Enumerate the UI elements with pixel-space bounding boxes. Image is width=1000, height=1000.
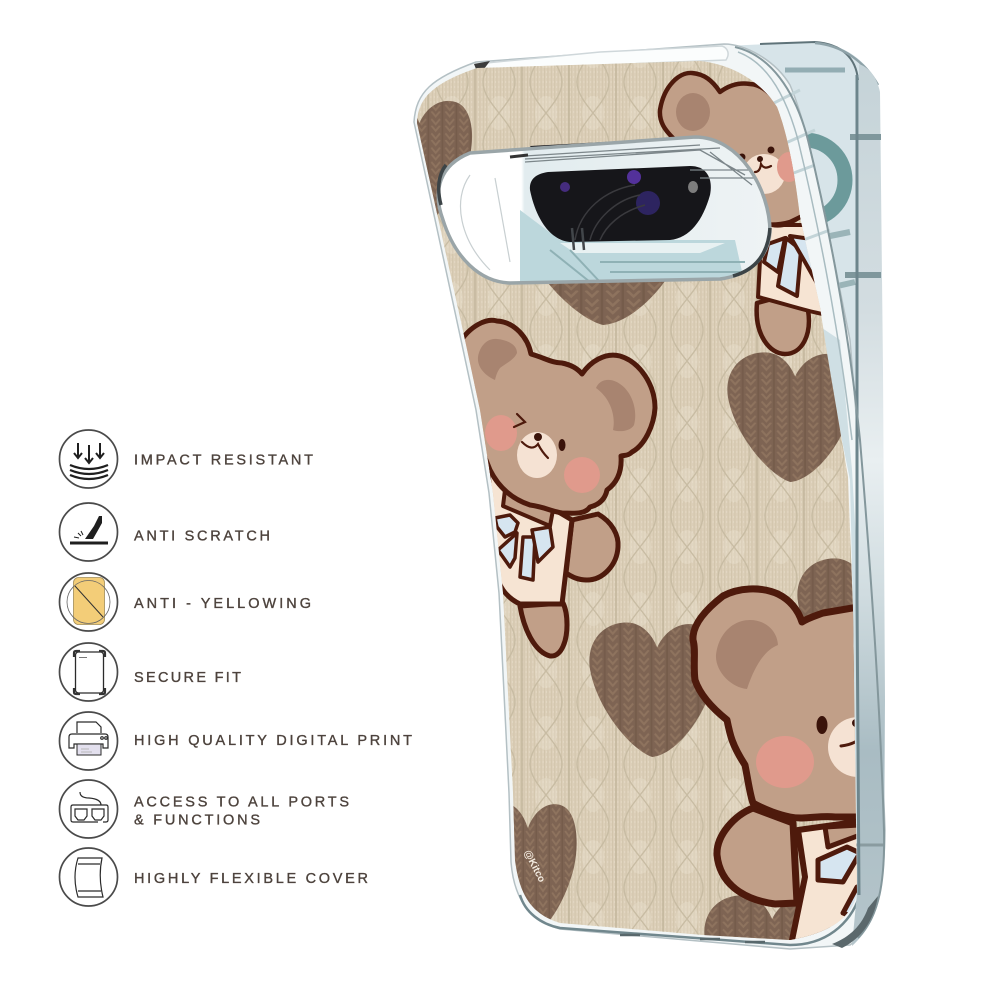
feature: ports and functions: & FUNCTIONS	[134, 812, 260, 828]
watermark: @Kitco	[521, 848, 547, 884]
bear: centre left	[458, 320, 655, 656]
bow	[495, 515, 553, 580]
bear: top right	[660, 73, 840, 354]
phone: side rail	[735, 47, 885, 948]
feature: anti yellowing: ANTI - YELLOWING	[134, 596, 311, 612]
feature: secure fit	[60, 643, 241, 701]
feature: ports and functions	[60, 780, 349, 838]
bow	[816, 844, 857, 916]
feature: anti scratch: ANTI SCRATCH	[134, 528, 270, 544]
knit background	[417, 61, 857, 940]
lens bar	[530, 166, 711, 242]
feature: digital print	[60, 712, 412, 770]
feature: secure fit: SECURE FIT	[134, 670, 241, 686]
knitted hearts	[417, 70, 856, 940]
bear: bottom right	[689, 585, 857, 940]
phone: back body	[700, 42, 884, 700]
camera window tint	[520, 210, 745, 285]
feature: anti yellowing	[60, 573, 311, 631]
feature: impact resistant	[60, 430, 313, 488]
feature list	[60, 430, 412, 906]
phone: clear case shell	[414, 44, 885, 949]
feature: digital print: HIGH QUALITY DIGITAL PRINT	[134, 733, 412, 749]
camera bump	[438, 137, 770, 285]
feature: flexible cover: HIGHLY FLEXIBLE COVER	[134, 871, 368, 887]
printed back panel	[417, 61, 857, 940]
feature: ports and functions: ACCESS TO ALL PORTS	[134, 794, 349, 810]
feature: anti scratch	[60, 503, 270, 561]
feature: impact resistant: IMPACT RESISTANT	[134, 452, 313, 468]
feature: flexible cover	[60, 848, 368, 906]
